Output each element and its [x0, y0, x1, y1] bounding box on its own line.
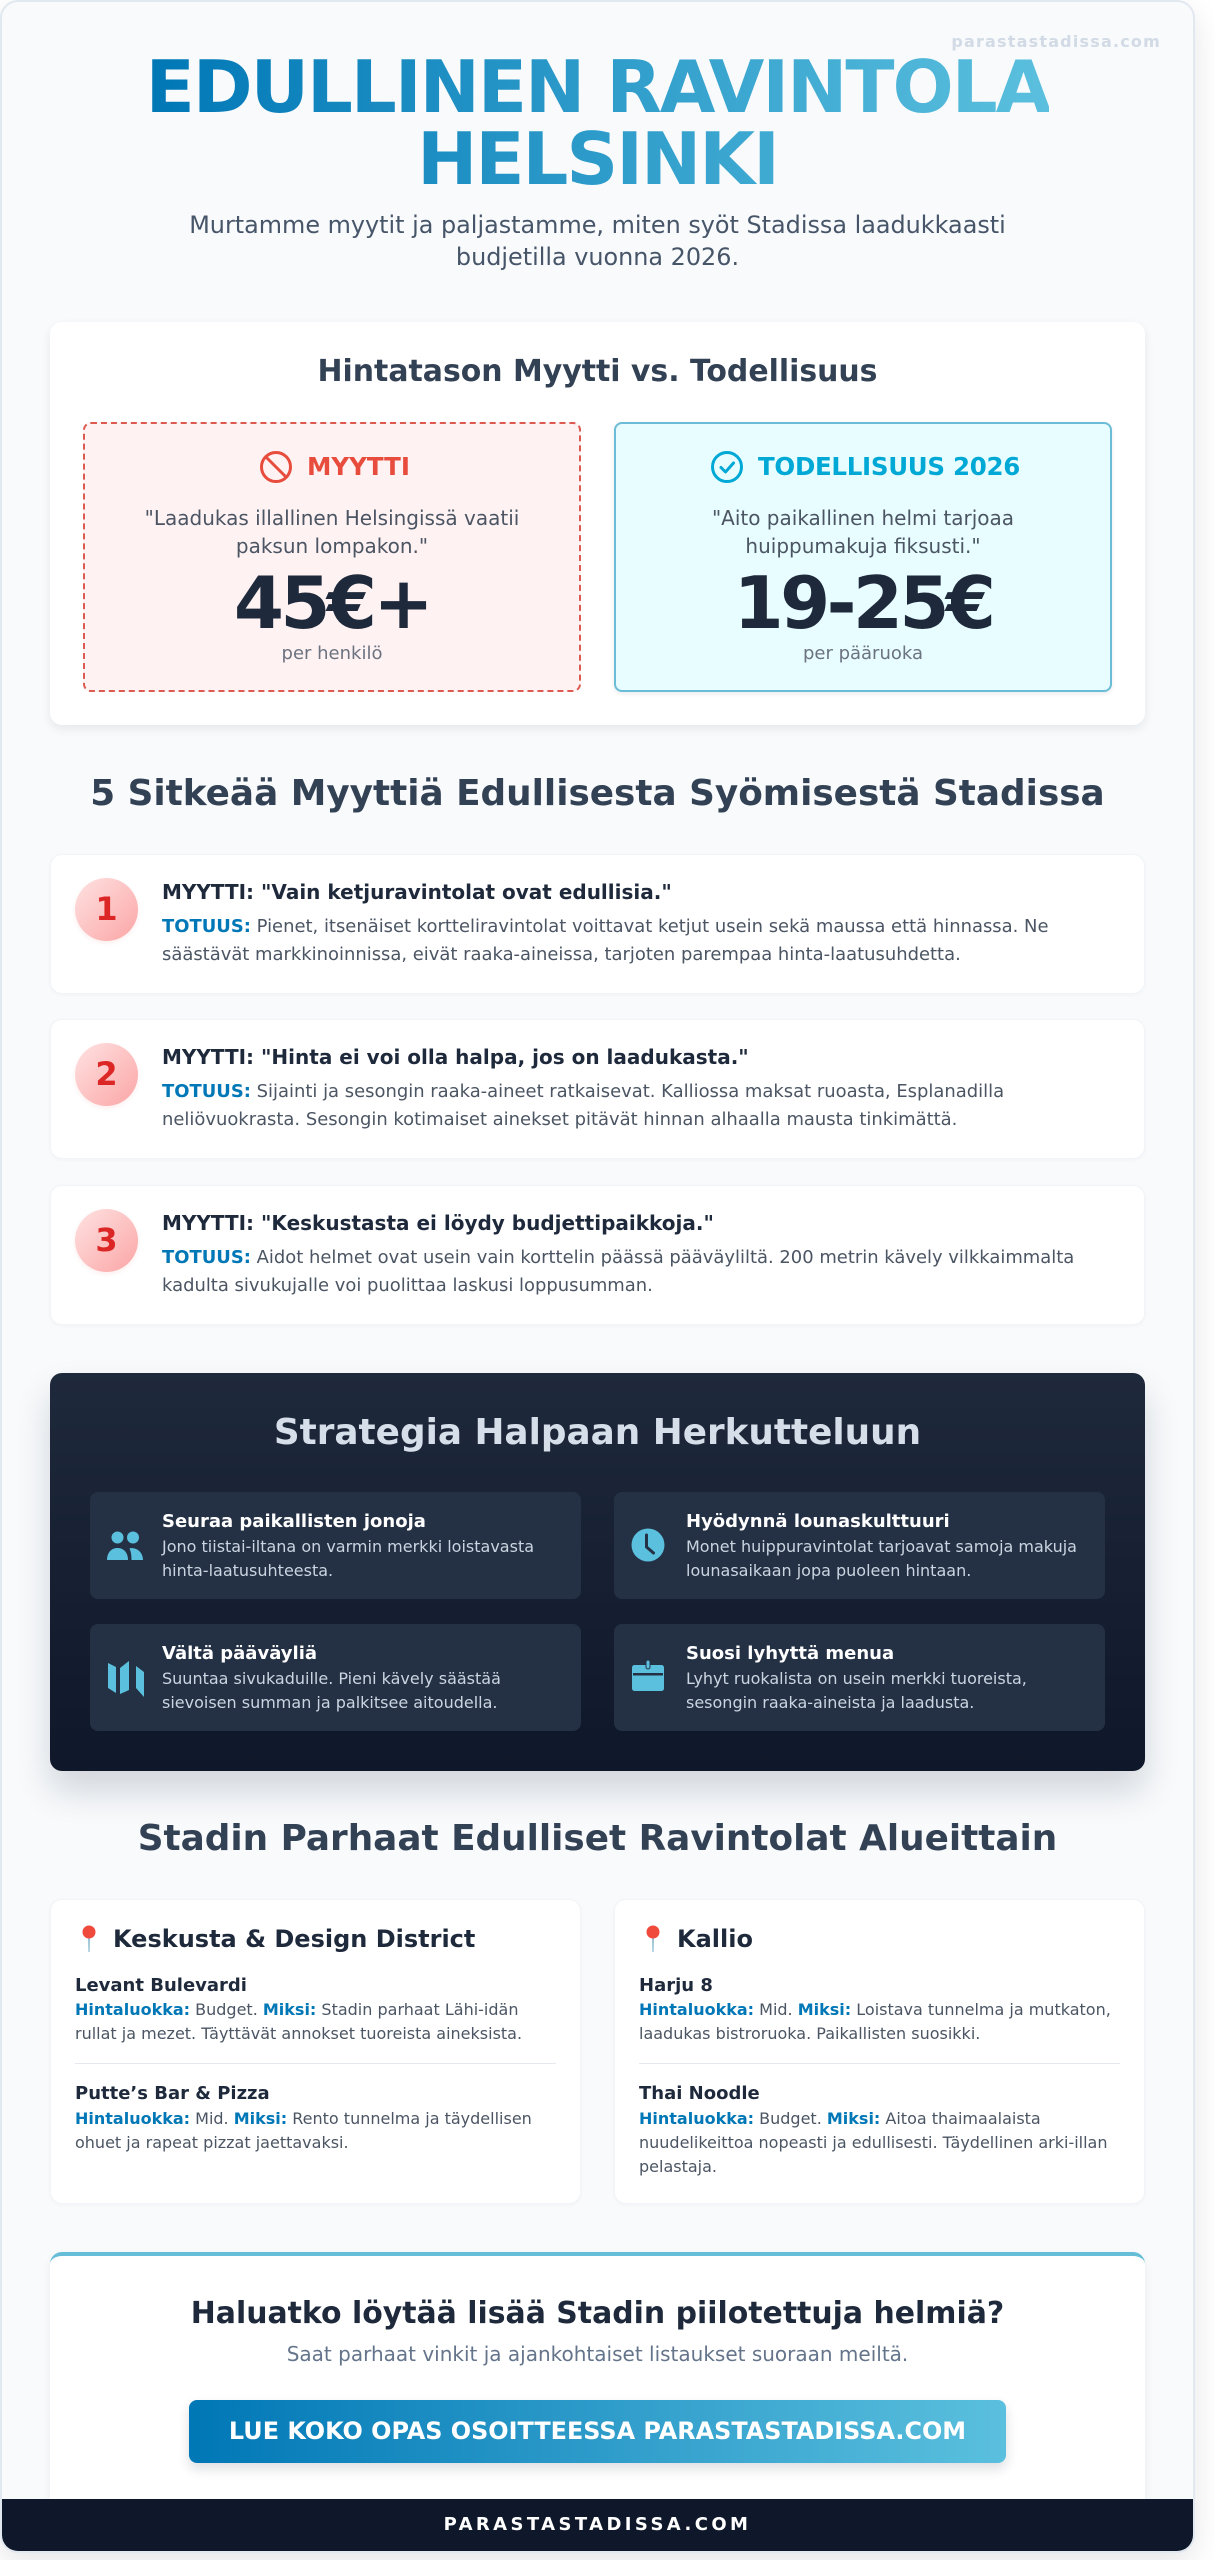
truth text: TOTUUS: Pienet, itsenäiset kortteliravintolat voittavat ketjut usein sekä maussa että hinnassa. Ne — [162, 916, 1048, 937]
panel: call to action — [50, 2252, 1145, 2512]
panel: myth — [83, 422, 581, 692]
restaurant text: nuudelikeittoa nopeasti ja edullisesti. Täydellinen arki-illan — [639, 2133, 1108, 2152]
restaurant text — [639, 2109, 1108, 2176]
tip text: Jono tiistai-iltana on varmin merkki loistavasta — [162, 1537, 534, 1556]
myth quote — [145, 506, 519, 558]
number badge: 1 — [95, 890, 118, 928]
tip text: sesongin raaka-aineista ja laadusta. — [686, 1693, 974, 1712]
watermark: parastastadissa.com — [951, 32, 1161, 51]
number badge: 2 — [95, 1055, 118, 1093]
heading: price myth vs reality: Hintatason Myytti vs. Todellisuus — [318, 354, 877, 389]
tip title: Vältä pääväyliä — [162, 1643, 317, 1664]
panel: myth 3 — [50, 1185, 1145, 1325]
restaurant text — [75, 2000, 522, 2043]
icon: prohibited — [260, 451, 292, 483]
icon: pin — [646, 1926, 660, 1952]
reality label: TODELLISUUS 2026 — [758, 452, 1020, 481]
myth label: MYYTTI — [307, 452, 410, 481]
CTA button — [189, 2400, 1006, 2463]
myth title: MYYTTI: "Keskustasta ei löydy budjettipaikkoja." — [162, 1211, 714, 1235]
truth text — [162, 1247, 1074, 1296]
restaurant text: Hintaluokka: Mid. Miksi: Rento tunnelma ja täydellisen — [75, 2109, 532, 2128]
truth text: kadulta sivukujalle voi puolittaa laskusi loppusumman. — [162, 1275, 653, 1296]
panel: price myth vs reality — [50, 322, 1145, 725]
tip text — [686, 1669, 1027, 1712]
area title: Keskusta & Design District — [113, 1925, 475, 1953]
restaurant name: Harju 8 — [639, 1975, 713, 1996]
tip: short menu — [614, 1624, 1105, 1731]
panel: myth 1 — [50, 854, 1145, 994]
reality price unit: per pääruoka — [803, 643, 923, 664]
tip text: Monet huippuravintolat tarjoavat samoja makuja — [686, 1537, 1077, 1556]
truth text: TOTUUS: Aidot helmet ovat usein vain korttelin päässä pääväyliltä. 200 metrin kävely vilkkaimmalta — [162, 1247, 1074, 1268]
restaurant text: pelastaja. — [639, 2157, 717, 2176]
subtitle: Murtamme myytit ja paljastamme, miten syöt Stadissa laadukkaasti — [189, 211, 1006, 239]
reality quote: huippumakuja fiksusti." — [745, 534, 981, 558]
restaurant text: Hintaluokka: Budget. Miksi: Stadin parhaat Lähi-idän — [75, 2000, 518, 2019]
tip title: Seuraa paikallisten jonoja — [162, 1511, 426, 1532]
panel: strategy — [50, 1373, 1145, 1771]
heading: strategy: Strategia Halpaan Herkutteluun — [274, 1412, 921, 1453]
restaurant name: Levant Bulevardi — [75, 1975, 247, 1996]
icon: check circle — [711, 451, 743, 483]
tip text: hinta-laatusuhteesta. — [162, 1561, 333, 1580]
title: EDULLINEN RAVINTOLA — [146, 45, 1049, 129]
CTA button: LUE KOKO OPAS OSOITTEESSA PARASTASTADISSA.COM — [229, 2417, 966, 2445]
reality quote — [712, 506, 1014, 558]
number badge — [75, 1043, 138, 1106]
tip text: lounasaikaan jopa puoleen hintaan. — [686, 1561, 971, 1580]
myth price: 45€+ — [234, 561, 430, 645]
area title: Kallio — [677, 1925, 753, 1953]
panel: reality — [614, 422, 1112, 692]
CTA subtext: Saat parhaat vinkit ja ajankohtaiset listaukset suoraan meiltä. — [287, 2342, 908, 2366]
truth text: neliövuokrasta. Sesongin kotimaiset ainekset pitävät hinnan alhaalla mausta tinkimättä. — [162, 1109, 957, 1130]
tip title: Suosi lyhyttä menua — [686, 1643, 894, 1664]
tip text — [162, 1669, 501, 1712]
myth price unit: per henkilö — [282, 643, 382, 664]
tip title: Hyödynnä lounaskulttuuri — [686, 1511, 950, 1532]
tip: lunch — [614, 1492, 1105, 1599]
icon: map — [108, 1661, 144, 1697]
CTA heading: Haluatko löytää lisää Stadin piilotettuja helmiä? — [191, 2296, 1004, 2331]
heading: restaurants by area: Stadin Parhaat Edulliset Ravintolat Alueittain — [138, 1818, 1057, 1859]
truth text — [162, 916, 1048, 965]
footer: PARASTASTADISSA.COM — [444, 2514, 751, 2535]
icon: menu — [632, 1660, 664, 1691]
subtitle: budjetilla vuonna 2026. — [456, 243, 739, 271]
tip text — [161, 1537, 534, 1580]
restaurant text: laadukas bistroruoka. Paikallisten suosikki. — [639, 2024, 980, 2043]
myth quote: "Laadukas illallinen Helsingissä vaatii — [145, 506, 519, 530]
truth text: TOTUUS: Sijainti ja sesongin raaka-aineet ratkaisevat. Kalliossa maksat ruoasta, Esplanadilla — [162, 1081, 1004, 1102]
number badge: 3 — [95, 1221, 118, 1259]
number badge — [75, 878, 138, 941]
restaurant name: Thai Noodle — [639, 2083, 760, 2104]
myth title: MYYTTI: "Vain ketjuravintolat ovat edullisia." — [162, 880, 672, 904]
panel: Keskusta — [50, 1899, 581, 2204]
panel: Kallio — [614, 1899, 1145, 2204]
footer — [2, 2499, 1193, 2551]
tip text: sievoisen summan ja palkitsee aitoudella. — [162, 1693, 497, 1712]
subtitle — [189, 211, 1006, 271]
tip: queues — [90, 1492, 581, 1599]
panel: myth 2 — [50, 1019, 1145, 1159]
icon: people — [107, 1532, 143, 1560]
restaurant text: Hintaluokka: Mid. Miksi: Loistava tunnelma ja mutkaton, — [639, 2000, 1111, 2019]
icon: pin — [82, 1926, 96, 1952]
truth text — [162, 1081, 1004, 1130]
tip text — [686, 1537, 1077, 1580]
restaurant text — [639, 2000, 1111, 2043]
heading: myths: 5 Sitkeää Myyttiä Edullisesta Syömisestä Stadissa — [90, 773, 1105, 814]
icon: clock — [632, 1528, 664, 1562]
myth title: MYYTTI: "Hinta ei voi olla halpa, jos on laadukasta." — [162, 1045, 749, 1069]
reality price: 19-25€ — [734, 561, 992, 645]
restaurant text: ohuet ja rapeat pizzat jaettavaksi. — [75, 2133, 349, 2152]
restaurant text — [75, 2109, 532, 2152]
title: HELSINKI — [417, 117, 778, 201]
truth text: säästävät markkinoinnissa, eivät raaka-aineissa, tarjoten parempaa hinta-laatusuhdetta. — [162, 944, 961, 965]
restaurant name: Putte’s Bar & Pizza — [75, 2083, 270, 2104]
tip: side streets — [90, 1624, 581, 1731]
tip text: Lyhyt ruokalista on usein merkki tuoreista, — [686, 1669, 1027, 1688]
number badge — [75, 1209, 138, 1272]
myth quote: paksun lompakon." — [236, 534, 428, 558]
reality quote: "Aito paikallinen helmi tarjoaa — [712, 506, 1014, 530]
restaurant text: Hintaluokka: Budget. Miksi: Aitoa thaimaalaista — [639, 2109, 1041, 2128]
tip text: Suuntaa sivukaduille. Pieni kävely säästää — [162, 1669, 501, 1688]
title — [146, 45, 1049, 201]
restaurant text: rullat ja mezet. Täyttävät annokset tuoreista aineksista. — [75, 2024, 522, 2043]
